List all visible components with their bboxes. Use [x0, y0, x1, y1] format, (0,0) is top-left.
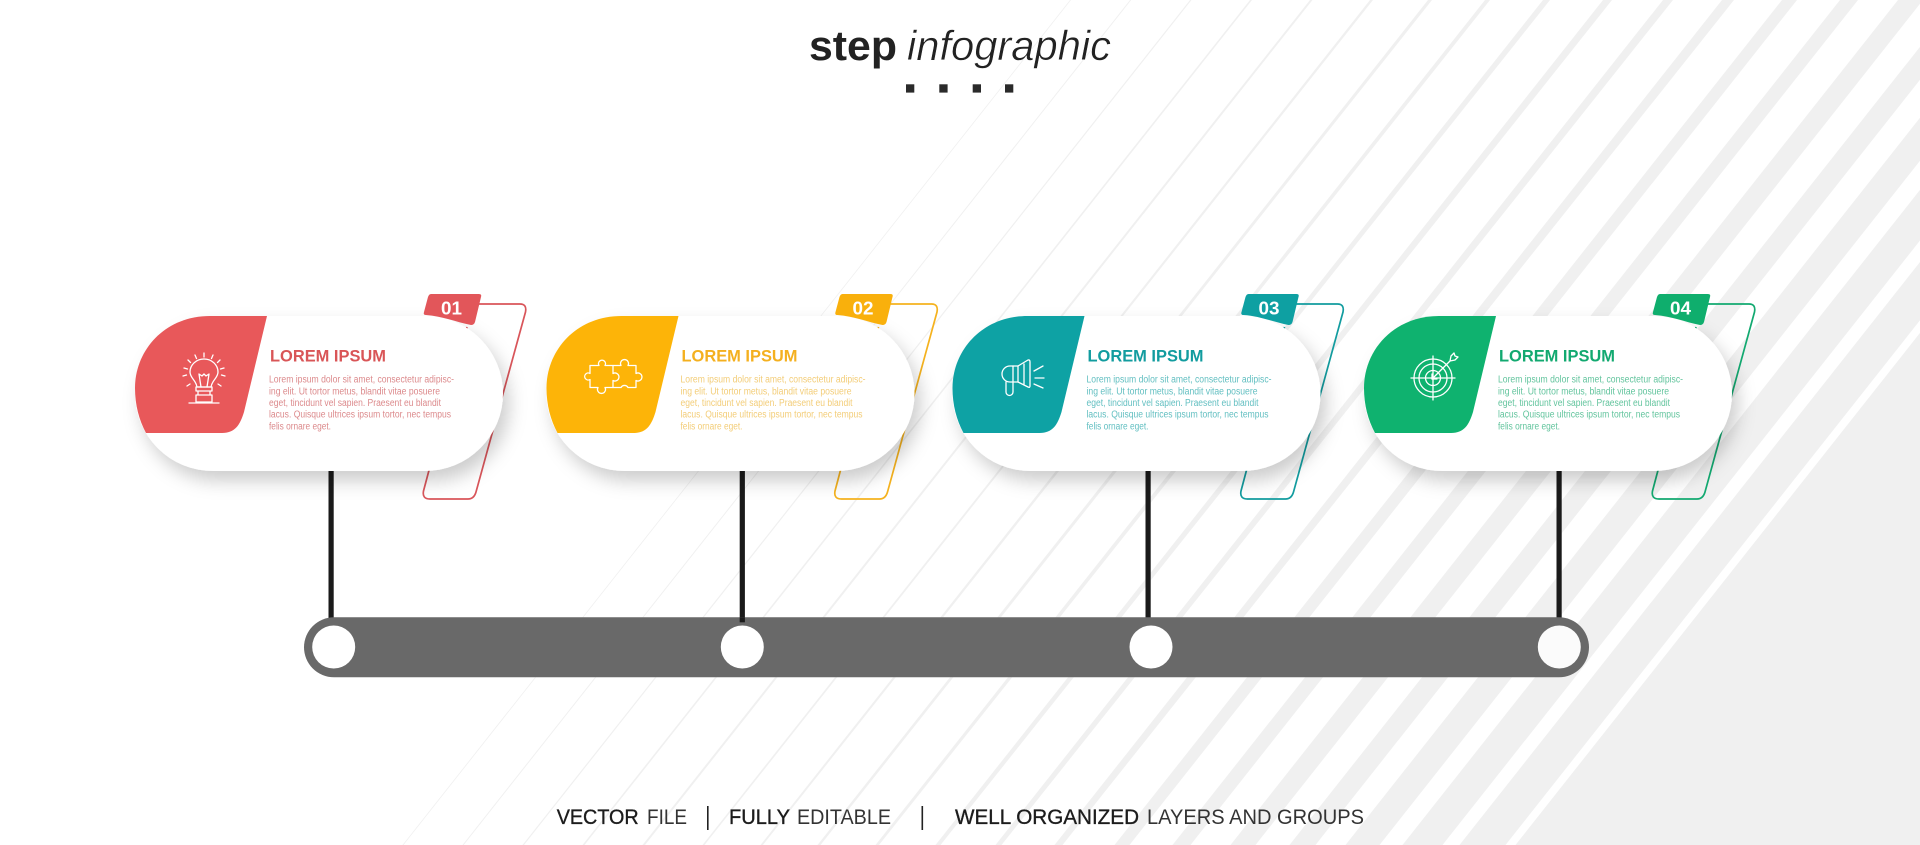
leaf 04: [1364, 316, 1496, 433]
body text 02: [680, 374, 866, 433]
body text 03: [1086, 374, 1272, 433]
outline frame 01: [423, 304, 526, 499]
leaf 01: [135, 316, 267, 433]
body text 01: eget, tincidunt vel sapien. Praesent eu blandit: [269, 398, 441, 409]
body text 02: ing elit. Ut tortor metus, blandit vitae posuere: [680, 386, 852, 397]
number tab 02: [835, 294, 893, 325]
body text 03: lacus. Quisque ultrices ipsum tortor, nec tempus: [1086, 410, 1268, 421]
body text 01: lacus. Quisque ultrices ipsum tortor, nec tempus: [269, 410, 451, 421]
timeline node 1: [312, 626, 355, 668]
body text 02: felis ornare eget.: [680, 422, 742, 433]
title dots: [906, 84, 1013, 93]
body text 01: felis ornare eget.: [269, 422, 331, 433]
leaf 03: [952, 316, 1084, 433]
number tab 04: 04: [1670, 298, 1691, 318]
footer text: EDITABLE: [797, 805, 891, 829]
number tab 02: 02: [852, 298, 874, 318]
footer text: [557, 805, 1364, 830]
panel: step 03: [952, 294, 1343, 499]
body text 04: lacus. Quisque ultrices ipsum tortor, nec tempus: [1498, 410, 1680, 421]
heading 02: LOREM IPSUM: [682, 346, 798, 366]
background: diagonal stripes: [402, 0, 1920, 845]
body text 03: Lorem ipsum dolor sit amet, consectetur adipisc-: [1086, 374, 1272, 385]
title: infographic: [907, 22, 1111, 69]
body text 04: felis ornare eget.: [1498, 422, 1560, 433]
timeline connectors: [328, 465, 1562, 622]
body text 04: ing elit. Ut tortor metus, blandit vitae posuere: [1498, 386, 1669, 397]
icon: light bulb: [183, 353, 225, 403]
card 01: [135, 316, 503, 471]
title: [809, 22, 1111, 69]
body text 02: eget, tincidunt vel sapien. Praesent eu blandit: [680, 398, 853, 409]
card 02: [546, 316, 914, 471]
panel: step 01: [135, 294, 526, 499]
card 03: [952, 316, 1320, 471]
body text 04: Lorem ipsum dolor sit amet, consectetur adipisc-: [1498, 374, 1683, 385]
panel: step 02: [546, 294, 937, 499]
body text 02: Lorem ipsum dolor sit amet, consectetur adipisc-: [680, 374, 866, 385]
number tab 03: [1241, 294, 1299, 325]
number tab 01: 01: [441, 298, 462, 318]
timeline bar: [304, 617, 1589, 677]
footer text: VECTOR: [557, 805, 639, 829]
outline frame 02: [835, 304, 937, 499]
footer text: LAYERS AND GROUPS: [1147, 805, 1364, 829]
body text 04: eget, tincidunt vel sapien. Praesent eu blandit: [1498, 398, 1670, 409]
timeline node 4: [1538, 626, 1581, 668]
timeline node 2: [721, 626, 764, 668]
leaf 02: [546, 316, 678, 433]
icon: megaphone: [1002, 360, 1044, 396]
footer text: FULLY: [729, 805, 790, 829]
icon: target: [1411, 353, 1458, 400]
number tab 01: [424, 294, 481, 325]
heading 04: LOREM IPSUM: [1499, 346, 1615, 366]
body text 02: lacus. Quisque ultrices ipsum tortor, nec tempus: [680, 410, 862, 421]
body text 03: eget, tincidunt vel sapien. Praesent eu blandit: [1086, 398, 1259, 409]
heading 01: LOREM IPSUM: [270, 346, 386, 366]
icon: puzzle: [585, 360, 642, 393]
body text 01: Lorem ipsum dolor sit amet, consectetur adipisc-: [269, 374, 454, 385]
outline frame 04: [1652, 304, 1755, 499]
number tab 03: 03: [1258, 298, 1280, 318]
timeline node 3: [1130, 626, 1172, 668]
body text 03: ing elit. Ut tortor metus, blandit vitae posuere: [1086, 386, 1258, 397]
body text 01: [269, 374, 454, 433]
body text 01: ing elit. Ut tortor metus, blandit vitae posuere: [269, 386, 440, 397]
footer text: WELL ORGANIZED: [955, 805, 1139, 829]
panel: step 04: [1364, 294, 1755, 499]
number tab 04: [1653, 294, 1710, 325]
title: step: [809, 22, 897, 69]
outline frame 03: [1241, 304, 1343, 499]
body text 04: [1498, 374, 1683, 433]
card 04: [1364, 316, 1732, 471]
body text 03: felis ornare eget.: [1086, 422, 1148, 433]
footer text: FILE: [647, 805, 687, 829]
heading 03: LOREM IPSUM: [1088, 346, 1204, 366]
